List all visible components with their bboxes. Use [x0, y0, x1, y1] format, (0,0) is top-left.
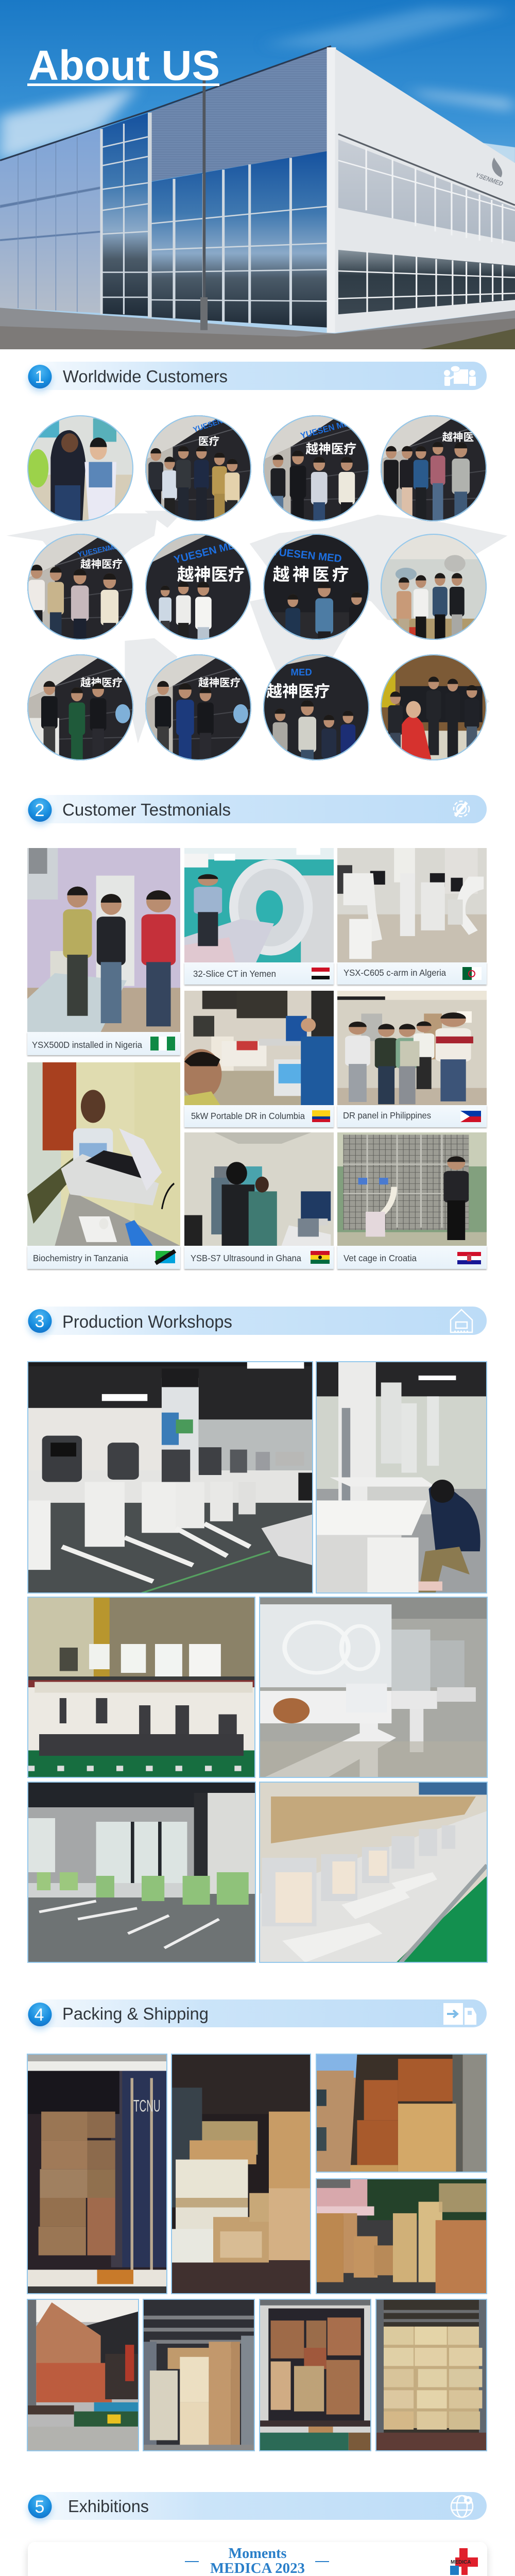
- logo: MEDICA: MEDICA: [451, 2560, 471, 2565]
- workshop photo: mobile X-ray row: [28, 1362, 313, 1593]
- caption: Croatia: [337, 1246, 487, 1269]
- installation photo: DR panel in Philippines: [337, 991, 487, 1105]
- packing photo: orange crate loading: [27, 2299, 139, 2451]
- workshop photo: DR system assembly: [316, 1362, 487, 1593]
- installation photo: Biochemistry in Tanzania: [27, 1062, 180, 1246]
- packing photo: blue container: [27, 2054, 167, 2294]
- customer photo circle 3: YUESEN MED: [300, 417, 356, 440]
- customer photo circle 1: [27, 415, 133, 521]
- customer photo circle 11: MED: [291, 667, 312, 677]
- customer photo circle 5: [27, 534, 133, 640]
- packing photo: pale crates in container: [143, 2299, 254, 2451]
- packing photo: blue container: TCNU: [133, 2096, 161, 2115]
- customer photo circle 3: 越神医疗: [305, 442, 356, 456]
- installation photo: 5kW Portable DR in Columbia: [180, 991, 334, 1105]
- caption: Philippines: [337, 1105, 487, 1127]
- customer photo circle 7: [263, 534, 369, 640]
- caption: Ghana: [184, 1246, 334, 1269]
- hero photo: factory building: [0, 0, 515, 349]
- customer photo circle 3: [263, 415, 369, 521]
- section header 3: Production Workshops: Production Workshops: [62, 1312, 232, 1332]
- customer photo circle 12: [381, 654, 487, 770]
- customer photo circle 5: 越神医疗: [80, 558, 123, 570]
- flag: Colombia: [312, 1110, 330, 1122]
- customer photo circle 11: [263, 654, 369, 760]
- section header 1: Worldwide Customers: 1: [35, 367, 44, 387]
- icon: house workshop: [451, 1310, 472, 1332]
- customer photo circle 4: 越神医: [442, 431, 474, 443]
- world map background: [7, 511, 507, 743]
- flag: Philippines: [460, 1111, 481, 1122]
- section header 5: Exhibitions: Exhibitions: [68, 2497, 149, 2516]
- icon: delivery truck: [443, 2003, 476, 2025]
- customer photo circle 10: [145, 654, 251, 760]
- icon: people meeting: [444, 366, 476, 386]
- caption: Nigeria: YSX500D installed in Nigeria: [32, 1040, 142, 1050]
- packing photo: crates in yard: [316, 2179, 487, 2294]
- workshop photo: ultrasound carts: [28, 1597, 255, 1777]
- customer photo circle 2: YUESEN: [192, 417, 224, 434]
- section header 1: Worldwide Customers: Worldwide Customers: [63, 367, 228, 386]
- customer photo circle 6: YUESEN MED: [173, 537, 244, 566]
- section header 5: Exhibitions: [28, 2492, 487, 2520]
- customer photo circle 6: [145, 534, 251, 640]
- flag: Croatia: [457, 1252, 481, 1264]
- workshop photo: laptop ultrasound line: [260, 1782, 487, 1962]
- customer photo circle 5: YUESENMED: [77, 541, 125, 559]
- logo on wall: YSENMED: [474, 171, 505, 188]
- packing photo: brown crates with green ramp: [260, 2299, 371, 2451]
- caption: Tanzania: Biochemistry in Tanzania: [33, 1253, 128, 1263]
- customer photo circle 6: 越神医疗: [177, 565, 245, 584]
- customer photo circle 7: 越神医疗: [273, 565, 349, 584]
- section header 2: Customer Testmonials: 2: [35, 801, 44, 820]
- customer photo circle 2: 医疗: [198, 436, 219, 448]
- logo: MEDICA: [450, 2548, 478, 2575]
- customer photo circle 2: [145, 415, 251, 521]
- caption: Croatia: Vet cage in Croatia: [344, 1253, 417, 1263]
- flag: Yemen: [312, 968, 330, 979]
- caption: Philippines: DR panel in Philippines: [343, 1110, 431, 1121]
- section header 2: Customer Testmonials: Customer Testmonials: [62, 800, 231, 819]
- exhibition card: MEDICA 2023: [28, 2542, 487, 2576]
- flag: Nigeria: [150, 1037, 175, 1050]
- caption: Yemen: 32-Slice CT in Yemen: [193, 969, 276, 979]
- logo on wall: [474, 155, 514, 188]
- customer photo circle 9: 越神医疗: [80, 677, 123, 689]
- caption: Algeria: [337, 962, 487, 985]
- card heading: Moments: [229, 2545, 286, 2562]
- caption: Nigeria: [27, 1032, 180, 1055]
- caption: Columbia: 5kW Portable DR in Columbia: [191, 1111, 305, 1121]
- section header 4: Packing & Shipping: Packing & Shipping: [62, 2004, 209, 2023]
- caption: Ghana: YSB-S7 Ultrasound in Ghana: [191, 1253, 301, 1263]
- title: About US: About US: [28, 42, 220, 89]
- customer photo circle 7: YUESEN MED: [271, 546, 342, 565]
- customer photo circle 10: 越神医疗: [198, 677, 241, 689]
- packing photo: white and plywood crates: [171, 2054, 311, 2294]
- customer photo circle 4: [381, 415, 487, 521]
- icon: globe with pin: [451, 2496, 473, 2517]
- installation photo: 32-Slice CT in Yemen: [184, 848, 334, 962]
- customer photo circle 11: 越神医疗: [266, 682, 330, 700]
- installation photo: YSX-C605 c-arm in Algeria: [337, 848, 487, 962]
- caption: Algeria: YSX-C605 c-arm in Algeria: [344, 968, 446, 978]
- section header 3: Production Workshops: 3: [35, 1312, 44, 1331]
- installation photo: YSX500D in Nigeria: [27, 848, 180, 1032]
- packing photo: orange crates in container: [316, 2054, 487, 2172]
- section header 4: Packing & Shipping: 4: [35, 2005, 44, 2025]
- caption: Columbia: [184, 1105, 334, 1127]
- section header 2: Customer Testmonials: [28, 795, 487, 823]
- section header 4: Packing & Shipping: [28, 1999, 487, 2027]
- section header 5: Exhibitions: 5: [35, 2497, 44, 2517]
- workshop photo: infant incubators: [260, 1597, 487, 1777]
- flag: Ghana: [311, 1251, 330, 1264]
- customer photo circle 9: [27, 654, 133, 760]
- customer photo circle 8: [381, 534, 487, 640]
- flag: Tanzania: [156, 1251, 175, 1263]
- caption: Yemen: [184, 962, 334, 985]
- packing photo: plywood crate wall: [376, 2299, 487, 2451]
- card heading: [185, 2545, 329, 2576]
- caption: Tanzania: [27, 1246, 180, 1269]
- workshop photo: portable robots by window: [28, 1782, 255, 1962]
- installation photo: Vet cage in Croatia: [337, 1132, 487, 1246]
- installation photo: YSB-S7 Ultrasound in Ghana: [184, 1132, 334, 1246]
- icon: gear and wrench: [454, 801, 469, 817]
- flag: Algeria: [462, 967, 482, 980]
- section header 1: Worldwide Customers: [28, 362, 487, 390]
- section header 3: Production Workshops: [28, 1307, 487, 1335]
